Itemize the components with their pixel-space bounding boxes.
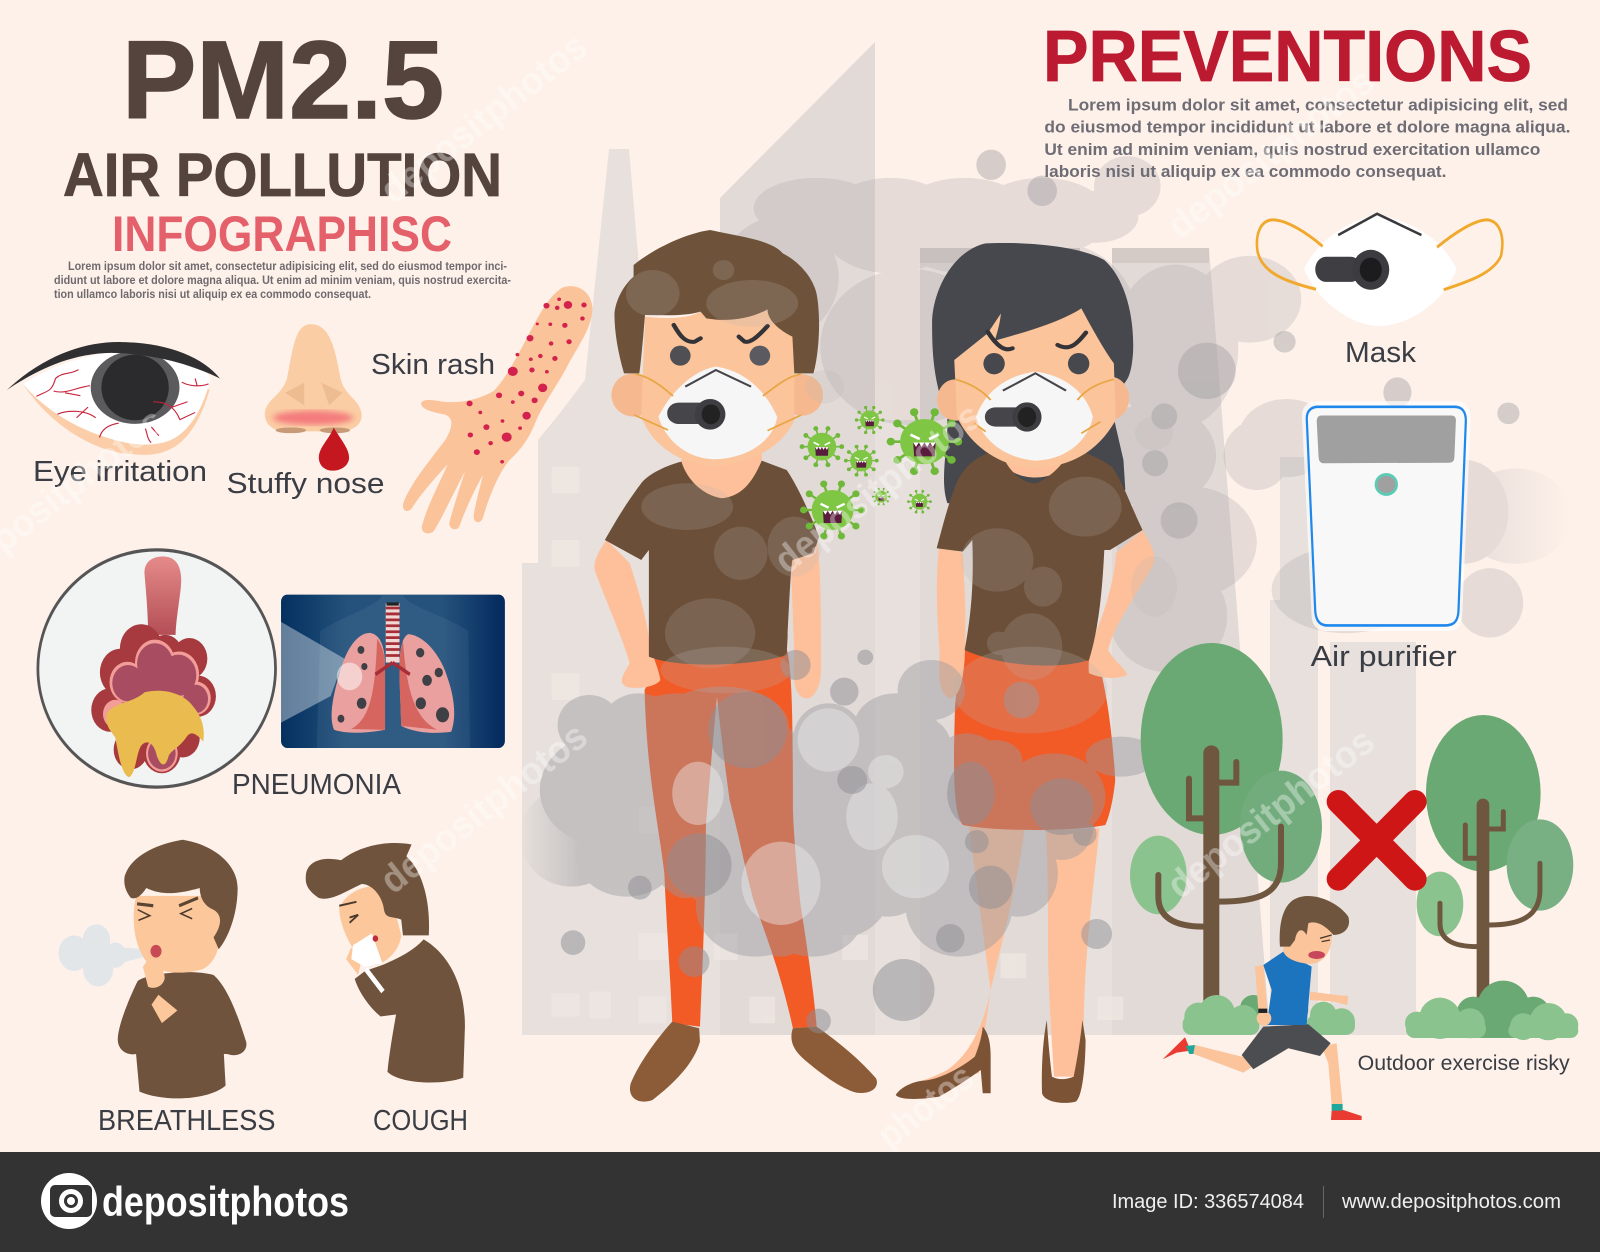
icon: stuffy nose <box>265 324 362 471</box>
label: mask: Mask <box>1345 337 1417 369</box>
footer website: www.depositphotos.com <box>1341 1191 1561 1213</box>
smoke: translucent circles over upper bodies <box>626 260 1177 680</box>
face masks worn by the characters <box>634 367 1114 538</box>
smoke: separate darker particles top right <box>976 150 1520 539</box>
woman lower body <box>896 650 1115 1103</box>
label: skin rash: Skin rash <box>371 349 495 381</box>
diagonal stock watermarks: depositphotos <box>767 395 990 582</box>
icon: arm with skin rash <box>403 286 592 533</box>
woman head <box>937 308 1129 468</box>
icon: air purifier <box>1302 401 1471 631</box>
icon: alveoli magnifier circle <box>38 550 276 787</box>
footer logo camera <box>41 1173 97 1229</box>
label: pneumonia: PNEUMONIA <box>232 769 402 801</box>
icon: breathless man <box>59 840 246 1098</box>
man trousers <box>645 650 817 1028</box>
preventions text block: Lorem ipsum dolor sit amet, consectetur adipisicing elit, sed <box>1068 96 1568 115</box>
smoke: haze over waist and skirt <box>660 647 1107 733</box>
green virus particles <box>800 406 961 538</box>
smoke: individual dark particles in the lower area <box>561 650 1112 1033</box>
intro text block: tion ullamco laboris nisi ut aliquip ex ea commodo consequat. <box>54 289 371 301</box>
outdoor exercise scene <box>1130 643 1578 1120</box>
preventions text block: do eiusmod tempor incididunt ut labore et dolore magna aliqua. <box>1044 118 1570 137</box>
smoke: upper and right background clouds <box>720 156 1571 672</box>
character: woman <box>896 243 1154 1103</box>
prevention icons: mask and purifier <box>1257 214 1502 631</box>
label: stuffy nose: Stuffy nose <box>226 468 384 500</box>
character: man <box>594 230 877 1102</box>
man shoes <box>630 1022 877 1102</box>
title: PM2.5: PM2.5 <box>122 19 444 142</box>
woman skirt <box>954 650 1115 830</box>
footer image id: Image ID: 336574084 <box>1112 1191 1304 1213</box>
man head <box>611 230 823 467</box>
preventions text block: Ut enim ad minim veniam, quis nostrud exercitation ullamco <box>1044 140 1540 159</box>
woman upper body <box>937 308 1154 698</box>
left bushes <box>1183 995 1355 1035</box>
woman arms <box>937 443 1154 698</box>
intro text block <box>54 261 511 301</box>
diagonal stock watermarks: depositphotos <box>1160 60 1383 247</box>
icon: running man <box>1163 896 1362 1120</box>
heading: air pollution: AIR POLLUTION <box>63 141 502 209</box>
diagonal stock watermarks: depositphotos <box>373 715 596 902</box>
preventions text block <box>1044 96 1570 181</box>
man mask <box>634 367 801 459</box>
left tree <box>1130 643 1322 1000</box>
intro text block: Lorem ipsum dolor sit amet, consectetur adipisicing elit, sed do eiusmod tempor inci- <box>68 261 507 273</box>
icon: N95 mask <box>1257 214 1502 326</box>
symptom icons: pneumonia, breathless, cough <box>38 550 505 1098</box>
smoke: lighter puffs in the lower cloud <box>672 708 949 925</box>
intro text block: didunt ut labore et dolore magna aliqua. Ut enim ad minim veniam, quis nostrud exercita- <box>54 275 511 287</box>
diagonal stock watermarks: photos <box>870 1056 982 1157</box>
heading: infographisc: INFOGRAPHISC <box>112 206 452 262</box>
preventions text block: laboris nisi ut aliquip ex ea commodo consequat. <box>1044 162 1446 181</box>
smoke: dense lower cloud drifting over the figures <box>520 660 1157 957</box>
right bushes <box>1405 981 1578 1040</box>
diagonal stock watermarks <box>0 25 1383 1157</box>
label: outdoor exercise risky: Outdoor exercise risky <box>1358 1052 1570 1075</box>
man lower body <box>630 650 877 1102</box>
footer bar <box>0 1152 1600 1252</box>
icon: coughing man <box>306 843 465 1082</box>
woman long hair <box>932 243 1133 503</box>
label: air purifier: Air purifier <box>1311 641 1457 673</box>
woman t-shirt <box>937 450 1143 666</box>
woman mask <box>955 372 1114 461</box>
icon: irritated eye <box>7 342 220 455</box>
woman legs <box>916 827 1099 1083</box>
diagonal stock watermarks: depositphotos <box>373 25 596 212</box>
building windows <box>552 263 1123 1023</box>
woman heels <box>896 1020 1086 1103</box>
man arms <box>594 453 821 698</box>
footer logo wordmark: depositphotos <box>102 1178 349 1225</box>
heading: preventions: PREVENTIONS <box>1043 17 1532 97</box>
red cross warning <box>1338 802 1415 879</box>
icon: lung x-ray panel <box>281 595 505 748</box>
label: eye irritation: Eye irritation <box>33 456 207 488</box>
right tree <box>1417 715 1573 997</box>
city skyline buildings <box>522 42 1416 1035</box>
label: breathless: BREATHLESS <box>98 1105 276 1137</box>
symptom icons: eye, nose, arm <box>7 286 592 533</box>
label: cough: COUGH <box>373 1105 468 1137</box>
man upper body <box>594 230 823 698</box>
man t-shirt <box>605 461 819 665</box>
diagonal stock watermarks: depositphotos <box>1160 720 1383 907</box>
